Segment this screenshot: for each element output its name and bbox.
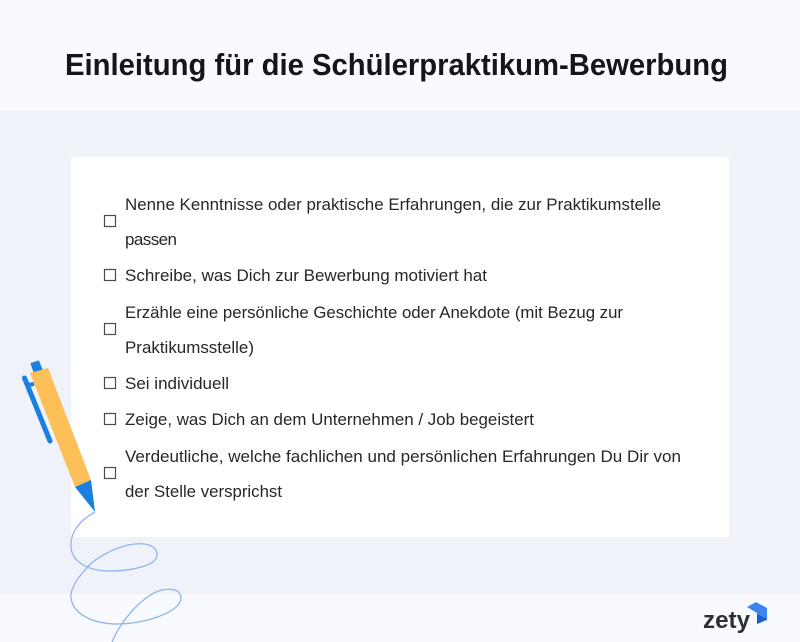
pen tip	[75, 480, 95, 512]
checklist item 5: Zeige, was Dich an dem Unternehmen / Job begeistert	[125, 410, 534, 429]
checklist item 3	[104, 303, 623, 357]
ink scribble	[71, 512, 181, 642]
panel: background band	[0, 111, 800, 594]
title: Einleitung für die Schülerpraktikum-Bewerbung	[65, 47, 728, 82]
pen clip	[24, 378, 50, 441]
checklist item 3: Erzähle eine persönliche Geschichte oder Anekdote (mit Bezug zur	[125, 303, 623, 322]
checklist item 1: passen	[125, 230, 177, 249]
logo: zety	[703, 602, 767, 634]
logo: zety: zety	[703, 607, 751, 634]
checklist item 6: der Stelle versprichst	[125, 482, 282, 501]
checklist item 4: Sei individuell	[125, 374, 229, 393]
checklist item 1: Nenne Kenntnisse oder praktische Erfahrungen, die zur Praktikumstelle	[125, 195, 661, 214]
checklist item 6: Verdeutliche, welche fachlichen und persönlichen Erfahrungen Du Dir von	[125, 447, 681, 466]
checklist item 3: Praktikumsstelle)	[125, 338, 254, 357]
pen clicker	[31, 361, 43, 375]
checklist item 6	[104, 447, 681, 501]
panel: checklist card	[71, 157, 729, 537]
pen body	[30, 368, 91, 487]
icon: pen with ink scribble	[24, 361, 181, 642]
checklist item 2: Schreibe, was Dich zur Bewerbung motiviert hat	[125, 266, 487, 285]
logo mark	[747, 602, 767, 624]
checklist item 1	[104, 195, 661, 249]
